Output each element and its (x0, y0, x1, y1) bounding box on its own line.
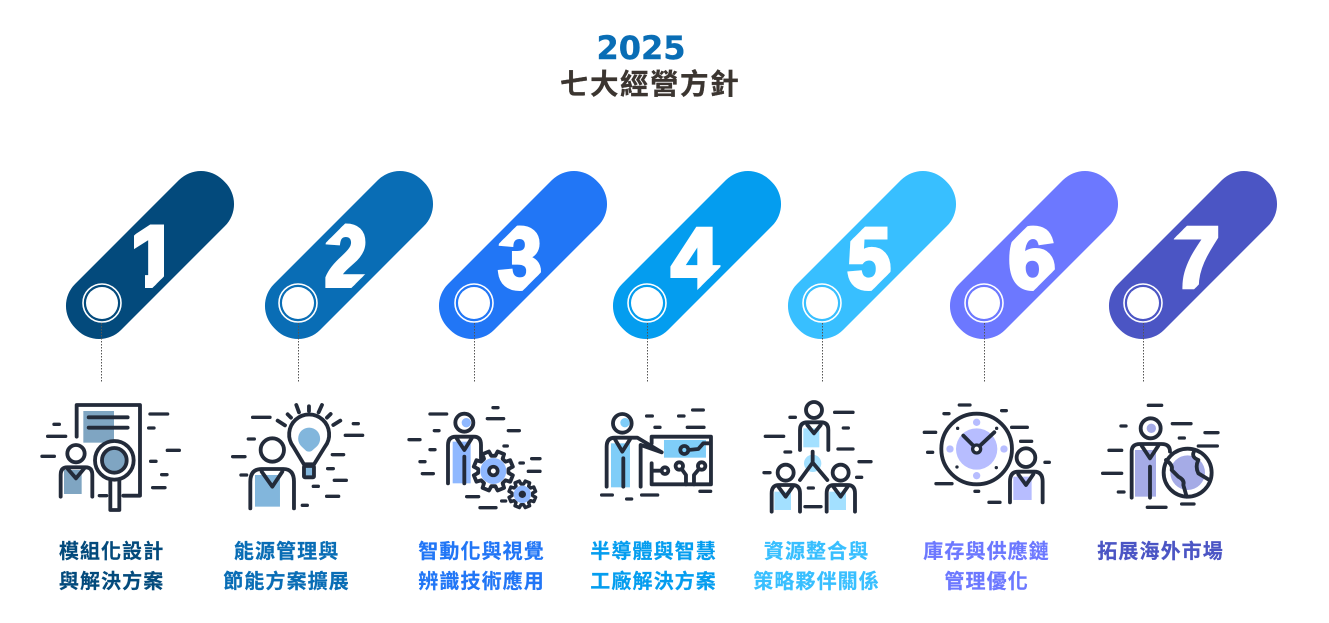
label 5: 策略夥伴關係 (753, 569, 880, 593)
label 3: 辨識技術應用 (418, 569, 545, 593)
icon: clock and person (924, 405, 1049, 502)
pill 1 (66, 171, 234, 339)
pill 7: 7 (1172, 210, 1220, 306)
label 2: 節能方案擴展 (223, 569, 350, 593)
pill 6: 6 (1008, 211, 1056, 307)
subtitle: 七大經營方針 (560, 69, 740, 101)
label 1: 模組化設計 (59, 539, 164, 563)
label 4: 半導體與智慧 (590, 540, 717, 563)
icon: presenter and circuit board (602, 410, 711, 499)
pill 6 (950, 171, 1118, 339)
icon: document and magnifier (42, 405, 179, 510)
icon: person and globe (1103, 405, 1218, 507)
label 6: 庫存與供應鏈 (923, 539, 1050, 563)
dotted connectors (102, 323, 1144, 383)
pill 3 (438, 171, 607, 339)
title (560, 29, 740, 101)
label 5: 資源整合與 (764, 539, 869, 563)
pill 2: 2 (324, 209, 368, 305)
label 6: 管理優化 (944, 569, 1029, 593)
icon: person and gears (409, 408, 540, 512)
label 4: 工廠解決方案 (590, 569, 717, 593)
label 3: 智動化與視覺 (418, 540, 545, 563)
pill 1: 1 (130, 209, 178, 305)
pill 4: 4 (671, 211, 719, 307)
icon: team structure (764, 402, 871, 512)
pill 4 (612, 171, 782, 339)
icon: light bulb and person (233, 405, 363, 508)
pill 7 (1108, 171, 1277, 339)
label 2: 能源管理與 (234, 539, 339, 563)
label 7: 拓展海外市場 (1097, 539, 1224, 563)
pill 2 (264, 171, 434, 339)
pill 5: 5 (847, 210, 891, 307)
label 1: 與解決方案 (59, 569, 164, 593)
year heading: 2025 (596, 29, 686, 67)
pill 3: 3 (498, 210, 542, 307)
pill 5 (788, 171, 956, 339)
